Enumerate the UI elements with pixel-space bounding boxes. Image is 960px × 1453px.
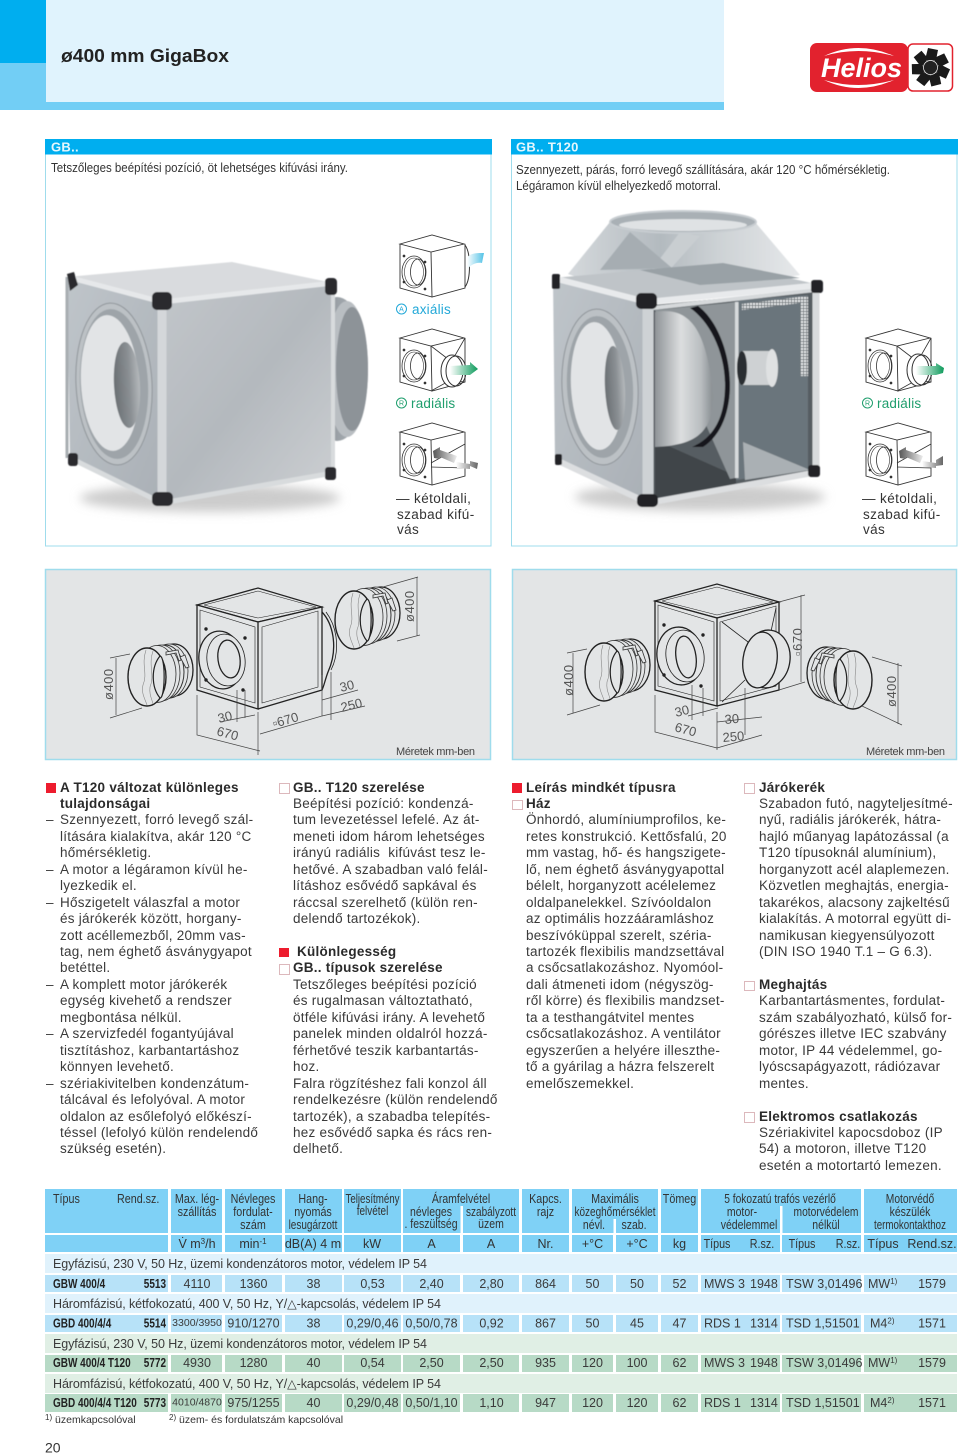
table column titles: Maximális bbox=[591, 1192, 639, 1206]
GB.. T120 heading bar: GB.. T120 bbox=[516, 140, 579, 154]
icon: radial airflow bbox=[866, 329, 944, 391]
table column titles bbox=[53, 1192, 946, 1232]
row group: GBD 400/4/4: RDS 1 bbox=[704, 1316, 741, 1330]
row group: GBD 400/4/4 T120: 40 bbox=[307, 1396, 320, 1410]
GB.. T120 description: Szennyezett, párás, forró levegő szállítására, akár 120 °C hőmérsékletig. bbox=[516, 162, 890, 177]
text column 2: installation: panelek minden oldalról hozzá- bbox=[293, 1026, 488, 1041]
table column titles: közeghőmérséklet bbox=[574, 1206, 656, 1219]
GB.. heading bar: GB.. bbox=[51, 140, 79, 154]
table column titles: készülék bbox=[890, 1206, 931, 1219]
footnote 2: üzem- és fordulatszám kapcsolóval bbox=[176, 1414, 343, 1426]
text column 1: T120 features: A szervizfedél fogantyújával bbox=[60, 1026, 234, 1041]
row group: GBD 400/4/4: 867 bbox=[535, 1316, 556, 1330]
text column 1: T120 features: könnyen levehető. bbox=[60, 1059, 174, 1074]
dimension: ø400 right: ø400 bbox=[884, 675, 899, 707]
table column titles: Tömeg bbox=[663, 1192, 696, 1206]
text: – bbox=[46, 1076, 54, 1091]
row group: GBD 400/4/4: 1314 bbox=[750, 1316, 778, 1330]
text column 4: impeller, drive, electrical: Karbantartásmentes, fordulat- bbox=[759, 993, 945, 1008]
table units row: Típus bbox=[704, 1237, 731, 1251]
row group: GBW 400/4 T120: 1) bbox=[890, 1356, 898, 1365]
text column 3: description, housing: bélelt, horganyzott acélelemez bbox=[526, 878, 716, 893]
row group: GBD 400/4/4 T120: 975/1255 bbox=[227, 1396, 280, 1410]
text column 4: impeller, drive, electrical: hajló műanyag lapátozással (a bbox=[759, 829, 949, 844]
table header bbox=[45, 1189, 957, 1252]
row group: GBD 400/4/4 T120: TSD 1,51501 bbox=[786, 1396, 860, 1410]
table column titles: névleges bbox=[410, 1206, 452, 1219]
table units row: +°C bbox=[626, 1237, 648, 1251]
row group: GBD 400/4/4: 0,29/0,46 bbox=[346, 1316, 399, 1330]
table column titles: Motorvédő bbox=[886, 1193, 934, 1206]
panel: GB.. T120 product bbox=[511, 139, 958, 546]
text column 4: impeller, drive, electrical: nyű, radiális járókerék, hátra- bbox=[759, 812, 941, 827]
text column 1: T120 features: betéttel. bbox=[60, 960, 110, 975]
text column 4: impeller, drive, electrical: Járókerék bbox=[759, 780, 825, 794]
table column titles: lesugárzott bbox=[289, 1219, 338, 1232]
row group: GBW 400/4 T120: Egyfázisú, 230 V, 50 Hz, üzemi kondenzátoros motor, védelem IP 54 bbox=[53, 1337, 427, 1351]
row group: GBD 400/4/4: 3300/3950 bbox=[172, 1317, 222, 1329]
text column 1: T120 features: lítására kialakítva, akár 120 °C bbox=[60, 829, 252, 844]
row group: GBW 400/4: MW bbox=[868, 1277, 890, 1291]
text column 4: impeller, drive, electrical: mentes. bbox=[759, 1076, 809, 1091]
note: dimensions in mm: Méretek mm-ben bbox=[396, 746, 475, 758]
label: kétoldali: szabad kifú- bbox=[863, 507, 941, 522]
text column 2: installation: meneti idom három lehetséges bbox=[293, 829, 485, 844]
row group: GBW 400/4: 1360 bbox=[240, 1277, 267, 1291]
table column titles: . feszültség bbox=[404, 1218, 458, 1231]
panel: dimension drawing GB.. bbox=[46, 570, 490, 760]
row group: GBW 400/4 T120: 2,50 bbox=[419, 1356, 444, 1370]
row group: GBW 400/4: 1948 bbox=[750, 1277, 778, 1291]
text column 3: description, housing: egyszerűen a helyére illeszthe- bbox=[526, 1043, 720, 1058]
text column 3: description, housing: emelőszemekkel. bbox=[526, 1076, 634, 1091]
text column 2: installation: Tetszőleges beépítési pozíció bbox=[293, 977, 477, 992]
drawing: right flexible cuff bbox=[807, 647, 872, 709]
text column 2: installation: tartozék), a szabadba telepítés- bbox=[293, 1109, 490, 1124]
title: ø400 mm GigaBox bbox=[61, 45, 230, 66]
table units row: kg bbox=[673, 1237, 686, 1251]
text column 3: description, housing: a csőcsatlakozáshoz. Nyomóol- bbox=[526, 960, 723, 975]
GB.. heading bar bbox=[45, 139, 492, 154]
row group: GBD 400/4/4: 45 bbox=[630, 1316, 644, 1330]
text column 1: T120 features: oldalon az esőlefolyó előkészí- bbox=[60, 1109, 252, 1124]
text column 2: installation: hez esővédő sapka és rács ren- bbox=[293, 1125, 492, 1140]
text: – bbox=[46, 812, 54, 827]
dimension lines bbox=[567, 595, 902, 750]
row group: GBW 400/4: 2,40 bbox=[419, 1277, 444, 1291]
table column titles: Max. lég- bbox=[175, 1192, 219, 1206]
footnote 1: üzemkapcsolóval bbox=[52, 1414, 136, 1426]
icon: radial airflow bbox=[400, 329, 478, 391]
table units row: +°C bbox=[582, 1237, 603, 1251]
text column 1: T120 features: megbontása nélkül. bbox=[60, 1010, 182, 1025]
text column 3: description, housing: tartozék flexibilis mandzsettával bbox=[526, 944, 724, 959]
row group: GBW 400/4: 0,53 bbox=[360, 1277, 385, 1291]
drawing: housing bbox=[195, 588, 337, 709]
dimension: 30: 30 bbox=[216, 708, 234, 726]
text column 3: description, housing: lő, nem éghető ásványgyapottal bbox=[526, 862, 724, 877]
text column 3: description, housing: Önhordó, alumíniumprofilos, ke- bbox=[526, 812, 726, 827]
row group: GBD 400/4/4: 0,50/0,78 bbox=[405, 1316, 458, 1330]
row group: GBD 400/4/4: 38 bbox=[307, 1316, 320, 1330]
row group: GBD 400/4/4 T120: 1314 bbox=[750, 1396, 778, 1410]
photo: closed GigaBox bbox=[67, 262, 368, 512]
table units row: min bbox=[239, 1237, 260, 1251]
text column 1: T120 features: és járókerék között, horgany- bbox=[60, 911, 242, 926]
table: technical data bbox=[45, 1189, 957, 1412]
text column 2: installation: lításhoz esővédő sapkával és bbox=[293, 878, 477, 893]
row group: GBD 400/4/4 T120: 947 bbox=[535, 1396, 556, 1410]
row group: GBD 400/4/4: 50 bbox=[586, 1316, 599, 1330]
text column 3: description, housing: az optimális hozzááramláshoz bbox=[526, 911, 714, 926]
table units row: dB(A) 4 m bbox=[285, 1237, 341, 1251]
table column titles: Kapcs. bbox=[529, 1192, 562, 1206]
row group: GBW 400/4: 864 bbox=[535, 1277, 556, 1291]
text column 4: impeller, drive, electrical: esetén a motortartó lemezen. bbox=[759, 1158, 942, 1173]
text column 1: T120 features: téssel (lefolyó külön rendelendő bbox=[60, 1125, 258, 1140]
row group: GBW 400/4: 50 bbox=[586, 1277, 599, 1291]
row group: GBW 400/4: 5513 bbox=[144, 1278, 166, 1291]
row group: GBD 400/4/4: 47 bbox=[673, 1316, 686, 1330]
table units row: kW bbox=[363, 1237, 381, 1251]
text column 1: T120 features: tálcával és lefolyóval. A motor bbox=[60, 1092, 245, 1107]
row group: GBW 400/4 T120: 1280 bbox=[240, 1356, 267, 1370]
text column 3: description, housing: oldalpanelekkel. Szívóoldalon bbox=[526, 895, 711, 910]
table column titles: fordulat- bbox=[233, 1205, 273, 1219]
text column 1: T120 features: szériakivitelben kondenzátum- bbox=[60, 1076, 249, 1091]
table column titles: Teljesítmény bbox=[345, 1193, 400, 1206]
row group: GBW 400/4 bbox=[45, 1254, 957, 1292]
label: radiális: R bbox=[865, 400, 870, 408]
table units row: Típus bbox=[789, 1237, 816, 1251]
table units row bbox=[178, 1237, 957, 1251]
text column 2: installation bbox=[279, 780, 498, 1156]
row group: GBD 400/4/4: 1571 bbox=[918, 1316, 946, 1330]
text: – bbox=[46, 862, 54, 877]
text column 3: description, housing bbox=[512, 780, 727, 1091]
panel: GB.. product bbox=[45, 139, 492, 546]
text column 4: impeller, drive, electrical: szám szabályozható, külső for- bbox=[759, 1010, 952, 1025]
drawing: right flexible cuff bbox=[335, 587, 400, 649]
row group: GBD 400/4/4 T120: 4010/4870 bbox=[172, 1396, 222, 1408]
row group: GBD 400/4/4: 0,92 bbox=[479, 1316, 504, 1330]
row group: GBD 400/4/4: TSD 1,51501 bbox=[786, 1316, 860, 1330]
text column 3: description, housing: ta a testhangátvitel mentes bbox=[526, 1010, 694, 1025]
row group: GBD 400/4/4: Háromfázisú, kétfokozatú, 400 V, 50 Hz, Y/△-kapcsolás, védelem IP 54 bbox=[53, 1297, 441, 1311]
text column 4: impeller, drive, electrical: lyóscsapágyazott, rádiózavar bbox=[759, 1059, 940, 1074]
GB.. T120 heading bar bbox=[511, 139, 958, 154]
logo: Helios: Helios bbox=[821, 53, 902, 83]
label: kétoldali: — kétoldali, bbox=[862, 491, 937, 506]
text column 1: T120 features: Hőszigetelt válaszfal a motor bbox=[60, 895, 240, 910]
row group: GBW 400/4: 52 bbox=[673, 1277, 686, 1291]
text column 4: impeller, drive, electrical: takarékos, alacsony zajkeltésű bbox=[759, 895, 950, 910]
row group: GBW 400/4 T120: 100 bbox=[627, 1356, 647, 1370]
table units row: 3 bbox=[201, 1237, 206, 1246]
text column 2: installation: ráccsal szerelhető (külön ren- bbox=[293, 895, 478, 910]
table column titles: motorvédelem bbox=[794, 1206, 858, 1219]
row group: GBW 400/4: 1) bbox=[890, 1277, 898, 1286]
GB.. T120 description: Légáramon kívül elhelyezkedő motorral. bbox=[516, 178, 721, 193]
row group: GBW 400/4: 1579 bbox=[918, 1277, 946, 1291]
table units row: Típus bbox=[867, 1237, 899, 1251]
panel: dimension drawing GB.. T120 bbox=[512, 570, 956, 760]
label: kétoldali: vás bbox=[397, 522, 419, 537]
table units row: -1 bbox=[260, 1237, 267, 1246]
row group: GBW 400/4: 38 bbox=[307, 1277, 320, 1291]
table units row: Rend.sz. bbox=[907, 1237, 957, 1251]
text: – bbox=[46, 977, 54, 992]
row group: GBW 400/4 T120: 935 bbox=[535, 1356, 556, 1370]
row group: GBW 400/4 T120: 1948 bbox=[750, 1356, 778, 1370]
row group: GBD 400/4/4 T120: 62 bbox=[673, 1396, 686, 1410]
dimension: 30 left: 30 bbox=[673, 702, 691, 720]
text column 4: impeller, drive, electrical: Szériakivitel kapocsdoboz (IP bbox=[759, 1125, 943, 1140]
text column 3: description, housing: Leírás mindkét típusra bbox=[526, 780, 676, 794]
text: – bbox=[46, 895, 54, 910]
label: kétoldali: — kétoldali, bbox=[396, 491, 471, 506]
text column 2: installation: tum levezetéssel lefelé. Az át- bbox=[293, 812, 480, 827]
dimension lines bbox=[110, 577, 420, 755]
text column 4: impeller, drive, electrical bbox=[744, 780, 953, 1173]
table units row: Nr. bbox=[538, 1237, 553, 1251]
table column titles: szabályzott bbox=[466, 1206, 517, 1219]
row group: GBD 400/4/4 bbox=[45, 1294, 957, 1332]
label: axiális: axiális bbox=[412, 302, 451, 317]
table column titles: Típus bbox=[53, 1192, 80, 1206]
row group: GBW 400/4 T120: 120 bbox=[582, 1356, 603, 1370]
row group: GBW 400/4 T120: 62 bbox=[673, 1356, 686, 1370]
table units row: V̇ m bbox=[178, 1237, 201, 1251]
text column 1: T120 features: zott acéllemezből, 20mm vas- bbox=[60, 928, 246, 943]
text column 1: T120 features bbox=[46, 780, 258, 1156]
text column 4: impeller, drive, electrical: Meghajtás bbox=[759, 977, 827, 992]
row group: GBW 400/4: 4110 bbox=[184, 1277, 210, 1291]
label: axiális: A bbox=[399, 306, 404, 314]
text column 3: description, housing: ről körre) és flexibilis mandzset- bbox=[526, 993, 725, 1008]
drawing: left flexible cuff bbox=[128, 644, 193, 706]
text column 1: T120 features: egység kivehető a rendszer bbox=[60, 993, 232, 1008]
label: kétoldali: szabad kifú- bbox=[397, 507, 475, 522]
text column 4: impeller, drive, electrical: kialakítás. A motorral együtt di- bbox=[759, 911, 951, 926]
row group: GBW 400/4 T120: MW bbox=[868, 1356, 890, 1370]
text column 3: description, housing: csőcsatlakozáshoz. A ventilátor bbox=[526, 1026, 721, 1041]
table column titles: Hang- bbox=[298, 1192, 328, 1206]
dimension: 250: 250 bbox=[722, 728, 745, 745]
row group: GBD 400/4/4: 2) bbox=[887, 1316, 895, 1326]
text column 1: T120 features: tulajdonságai bbox=[60, 796, 150, 811]
table column titles: motor- bbox=[727, 1206, 757, 1219]
row group: GBD 400/4/4 T120: GBD 400/4/4 T120 bbox=[53, 1397, 137, 1410]
dimension: 30 right: 30 bbox=[338, 677, 356, 695]
text column 2: installation: delhető. bbox=[293, 1141, 343, 1156]
text column 2: installation: és rugalmasan változtatható, bbox=[293, 993, 473, 1008]
table column titles: rajz bbox=[537, 1205, 554, 1219]
row group: GBD 400/4/4 T120: 1571 bbox=[918, 1396, 946, 1410]
dimension: 670 depth: 670 bbox=[673, 719, 698, 740]
row group: GBD 400/4/4 T120: 120 bbox=[582, 1396, 603, 1410]
row group: GBW 400/4: 2,80 bbox=[479, 1277, 504, 1291]
text column 2: installation: Beépítési pozíció: kondenzá- bbox=[293, 796, 474, 811]
text column 4: impeller, drive, electrical: górészes illetve IEC szabvány bbox=[759, 1026, 947, 1041]
text column 2: installation: hetővé. A szabadban való felál- bbox=[293, 862, 488, 877]
row group: GBW 400/4: Egyfázisú, 230 V, 50 Hz, üzemi kondenzátoros motor, védelem IP 54 bbox=[53, 1257, 427, 1271]
table column titles: nyomás bbox=[294, 1205, 332, 1219]
GB.. description: Tetszőleges beépítési pozíció, öt lehetséges kifúvási irány. bbox=[51, 160, 348, 175]
note: dimensions in mm: Méretek mm-ben bbox=[866, 746, 945, 758]
row group: GBD 400/4/4 T120: 0,50/1,10 bbox=[405, 1396, 458, 1410]
table column titles: Áramfelvétel bbox=[432, 1192, 490, 1206]
text column 4: impeller, drive, electrical: Elektromos csatlakozás bbox=[759, 1109, 918, 1124]
row group: GBD 400/4/4: M4 bbox=[870, 1316, 887, 1330]
table column titles: névl. bbox=[583, 1219, 605, 1232]
text column 2: installation: Különlegesség bbox=[297, 944, 396, 959]
table column titles: termokontakthoz bbox=[874, 1219, 946, 1232]
text column 2: installation: hoz. bbox=[293, 1059, 320, 1074]
row group: GBD 400/4/4 T120: Háromfázisú, kétfokozatú, 400 V, 50 Hz, Y/△-kapcsolás, védelem IP 54 bbox=[53, 1377, 441, 1391]
table column titles: szám bbox=[240, 1218, 266, 1232]
icon: axial airflow bbox=[400, 235, 484, 297]
row group: GBW 400/4 T120: 0,54 bbox=[360, 1356, 385, 1370]
row group: GBW 400/4 T120: 2,50 bbox=[479, 1356, 504, 1370]
row group: GBD 400/4/4: 5514 bbox=[144, 1318, 167, 1331]
icon: two-sided free outflow bbox=[400, 423, 478, 485]
text column 1: T120 features: szükség esetén). bbox=[60, 1141, 166, 1156]
text column 1: T120 features: hőmérsékletig. bbox=[60, 845, 151, 860]
table column titles: szállítás bbox=[178, 1205, 217, 1219]
row group: GBD 400/4/4 T120: M4 bbox=[870, 1396, 887, 1410]
table column titles: felvétel bbox=[357, 1205, 388, 1218]
drawing: left flexible cuff bbox=[585, 639, 650, 701]
row group: GBW 400/4: MWS 3 bbox=[704, 1277, 745, 1291]
text column 3: description, housing: Ház bbox=[526, 796, 551, 811]
label: kétoldali: vás bbox=[863, 522, 885, 537]
text column 1: T120 features: Szennyezett, forró levegő szál- bbox=[60, 812, 253, 827]
text column 4: impeller, drive, electrical: horganyzott acél alaplemezen. bbox=[759, 862, 950, 877]
text column 3: description, housing: retes konstrukció. Kettősfalú, 20 bbox=[526, 829, 727, 844]
table column titles: üzem bbox=[478, 1218, 504, 1231]
row group: GBW 400/4 T120: 1579 bbox=[918, 1356, 946, 1370]
text column 3: description, housing: beszívóküppal szerelt, széria- bbox=[526, 928, 712, 943]
logo: Helios bbox=[810, 43, 952, 92]
table units row: R.sz. bbox=[836, 1237, 860, 1251]
row group: GBW 400/4 T120: 40 bbox=[307, 1356, 320, 1370]
row group: GBD 400/4/4 T120: 0,29/0,48 bbox=[346, 1396, 399, 1410]
row group: GBD 400/4/4 T120: 1,10 bbox=[479, 1396, 504, 1410]
row group: GBW 400/4 T120 bbox=[45, 1334, 957, 1372]
text column 2: installation: Falra rögzítéshez fali konzol áll bbox=[293, 1076, 487, 1091]
icon: two-sided free outflow bbox=[866, 423, 943, 485]
table column titles: Névleges bbox=[231, 1192, 276, 1206]
row group: GBW 400/4 T120: TSW 3,01496 bbox=[786, 1356, 862, 1370]
dimension: 30 right: 30 bbox=[724, 711, 740, 727]
row group: GBW 400/4 T120: GBW 400/4 T120 bbox=[53, 1357, 131, 1370]
label: radiális: radiális bbox=[877, 396, 921, 411]
text column 4: impeller, drive, electrical: Szabadon futó, nagyteljesítmé- bbox=[759, 796, 953, 811]
row group: GBD 400/4/4 T120 bbox=[45, 1374, 957, 1412]
dimension: 250: 250 bbox=[339, 695, 364, 715]
dimension: ø400 right: ø400 bbox=[402, 590, 417, 622]
text column 2: installation: delendő tartozékok). bbox=[293, 911, 421, 926]
row group: GBW 400/4 T120: 5772 bbox=[144, 1357, 166, 1370]
row group: GBW 400/4: TSW 3,01496 bbox=[786, 1277, 862, 1291]
table units row: A bbox=[427, 1237, 436, 1251]
text column 4: impeller, drive, electrical: 54) a motoron, illetve T120 bbox=[759, 1141, 926, 1156]
drawing: housing with transition piece bbox=[653, 584, 794, 706]
dimension: ø400 left: ø400 bbox=[561, 664, 576, 696]
dimension: ø400 left: ø400 bbox=[101, 668, 116, 700]
text column 1: T120 features: A T120 változat különleges bbox=[60, 780, 239, 794]
row group: GBD 400/4/4 T120: 5773 bbox=[144, 1397, 166, 1410]
dimension: square 670: ▫670 bbox=[790, 628, 805, 656]
photo: open GigaBox T120 bbox=[552, 211, 825, 511]
text column 4: impeller, drive, electrical: Közvetlen meghajtás, energia- bbox=[759, 878, 949, 893]
table column titles: Rend.sz. bbox=[117, 1192, 159, 1206]
table column titles: nélkül bbox=[812, 1219, 840, 1232]
footnote 2: 2) bbox=[169, 1413, 176, 1422]
row group: GBW 400/4: 50 bbox=[630, 1277, 644, 1291]
text column 1: T120 features: tag, nem éghető ásványgyapot bbox=[60, 944, 252, 959]
footnote 1: 1) bbox=[45, 1413, 52, 1422]
row group: GBW 400/4 T120: MWS 3 bbox=[704, 1356, 745, 1370]
text column 1: T120 features: A komplett motor járókerék bbox=[60, 977, 227, 992]
row group: GBW 400/4 T120: 4930 bbox=[183, 1356, 211, 1370]
row group: GBD 400/4/4: 910/1270 bbox=[227, 1316, 280, 1330]
text column 1: T120 features: lyezkedik el. bbox=[60, 878, 137, 893]
row group: GBW 400/4: GBW 400/4 bbox=[53, 1278, 106, 1291]
text column 2: installation: GB.. típusok szerelése bbox=[293, 960, 443, 975]
header band bbox=[0, 0, 724, 110]
text column 2: installation: férhetővé teszik karbantartás- bbox=[293, 1043, 479, 1058]
text column 2: installation: GB.. T120 szerelése bbox=[293, 780, 425, 794]
text column 4: impeller, drive, electrical: (DIN ISO 1940 T.1 – G 6.3). bbox=[759, 944, 932, 959]
text column 4: impeller, drive, electrical: T120 típusoknál alumínium), bbox=[759, 845, 936, 860]
text column 4: impeller, drive, electrical: namikusan kiegyensúlyozott bbox=[759, 928, 935, 943]
table column titles: védelemmel bbox=[721, 1219, 777, 1232]
table units row: /h bbox=[205, 1237, 216, 1251]
label: radiális: R bbox=[399, 400, 404, 408]
row group: GBD 400/4/4 T120: 2) bbox=[887, 1396, 895, 1405]
text column 1: T120 features: A motor a légáramon kívül he- bbox=[60, 862, 248, 877]
table column titles: szab. bbox=[621, 1219, 647, 1232]
label: radiális: radiális bbox=[411, 396, 455, 411]
row group: GBD 400/4/4 T120: 120 bbox=[627, 1396, 647, 1410]
text column 2: installation: irányú radiális kifúvást tesz le- bbox=[293, 845, 486, 860]
text column 2: installation: ötféle kifúvási irány. A levehető bbox=[293, 1010, 485, 1025]
row group: GBD 400/4/4 T120: RDS 1 bbox=[704, 1396, 741, 1410]
dimension: square 670: ▫670 bbox=[271, 709, 300, 731]
text column 1: T120 features: tisztításhoz, karbantartáshoz bbox=[60, 1043, 239, 1058]
table column titles: 5 fokozatú trafós vezérlő bbox=[724, 1193, 836, 1206]
table units row: R.sz. bbox=[750, 1237, 774, 1251]
text column 3: description, housing: mm vastag, hő- és hangszigete- bbox=[526, 845, 726, 860]
text column 3: description, housing: dali átmeneti idom (négyszög- bbox=[526, 977, 714, 992]
text column 3: description, housing: tő a gyárilag a házra felszerelt bbox=[526, 1059, 714, 1074]
row group: GBD 400/4/4: GBD 400/4/4 bbox=[53, 1318, 112, 1331]
text column 2: installation: rendelkezésre (külön rendelendő bbox=[293, 1092, 498, 1107]
text column 4: impeller, drive, electrical: motor, IP 44 védelemmel, go- bbox=[759, 1043, 942, 1058]
table units row: A bbox=[487, 1237, 496, 1251]
text: – bbox=[46, 1026, 54, 1041]
dimension: 670 depth: 670 bbox=[215, 723, 240, 744]
